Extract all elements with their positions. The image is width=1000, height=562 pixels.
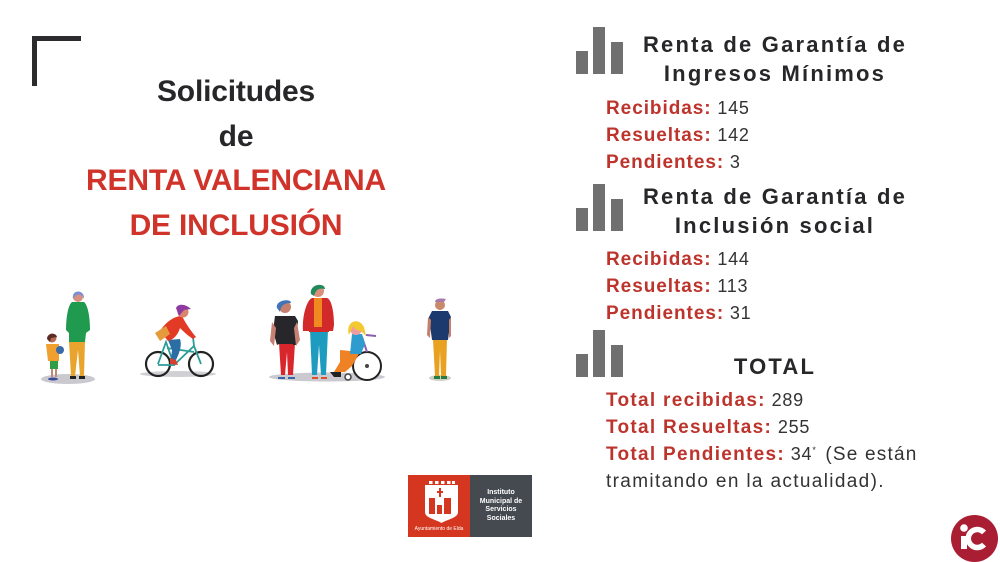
heading: Renta de Garantía de Ingresos Mínimos: Renta de Garantía de <box>643 32 907 57</box>
logo: iC badge <box>951 515 998 562</box>
title line: de: de <box>219 120 253 153</box>
stats: ingresos mínimos <box>606 98 750 173</box>
heading: Renta de Garantía de Ingresos Mínimos: Ingresos Mínimos <box>664 61 886 86</box>
heading: Renta de Garantía de Inclusión social: Renta de Garantía de <box>643 184 907 209</box>
stats: total <box>606 390 918 492</box>
icon: bar chart 1 <box>576 27 623 74</box>
stats: inclusión social: Resueltas: 113 <box>606 276 748 297</box>
stats: inclusión social: Pendientes: 31 <box>606 303 751 324</box>
stats: total: Total Resueltas: 255 <box>606 417 810 438</box>
heading: Renta de Garantía de Inclusión social <box>643 184 907 238</box>
logo: institute name: Instituto <box>487 489 515 496</box>
corner bracket <box>32 36 81 86</box>
logo: red crest panel: Ayuntamiento de Elda <box>415 526 464 532</box>
stats: ingresos mínimos: Pendientes: 3 <box>606 152 741 173</box>
title line: Renta Valenciana: RENTA VALENCIANA <box>86 164 386 197</box>
heading: Renta de Garantía de Inclusión social: Inclusión social <box>675 213 875 238</box>
title <box>86 75 386 242</box>
stats: inclusión social: Recibidas: 144 <box>606 249 750 270</box>
stats: ingresos mínimos: Recibidas: 145 <box>606 98 750 119</box>
stats: inclusión social <box>606 249 751 324</box>
figure: cyclist <box>140 305 216 377</box>
heading: Total: TOTAL <box>734 354 816 379</box>
logo: institute name: Sociales <box>487 514 515 522</box>
icon: bar chart 3 <box>576 330 623 377</box>
stats: total: tramitando en la actualidad). <box>606 471 885 492</box>
stats: total: Total recibidas: 289 <box>606 390 804 411</box>
logo: institute name <box>480 488 522 522</box>
logo: red crest panel <box>408 475 470 537</box>
stats: ingresos mínimos: Resueltas: 142 <box>606 125 750 146</box>
heading: Renta de Garantía de Ingresos Mínimos <box>643 32 907 86</box>
logo: Instituto Municipal de Servicios Sociales <box>408 475 532 537</box>
icon: bar chart 2 <box>576 184 623 231</box>
logo: institute name: Municipal de <box>480 498 522 504</box>
figure: mother and child <box>41 292 95 384</box>
figure: standing man <box>427 298 451 381</box>
stats: total: Total Pendientes: 34* (Se están <box>606 444 918 465</box>
logo: institute name: Servicios <box>485 506 517 513</box>
figure: group with wheelchair <box>269 285 385 382</box>
title line: Solicitudes: Solicitudes <box>157 75 315 108</box>
title line: De Inclusión: DE INCLUSIÓN <box>130 209 342 242</box>
illustration: people <box>41 284 451 384</box>
